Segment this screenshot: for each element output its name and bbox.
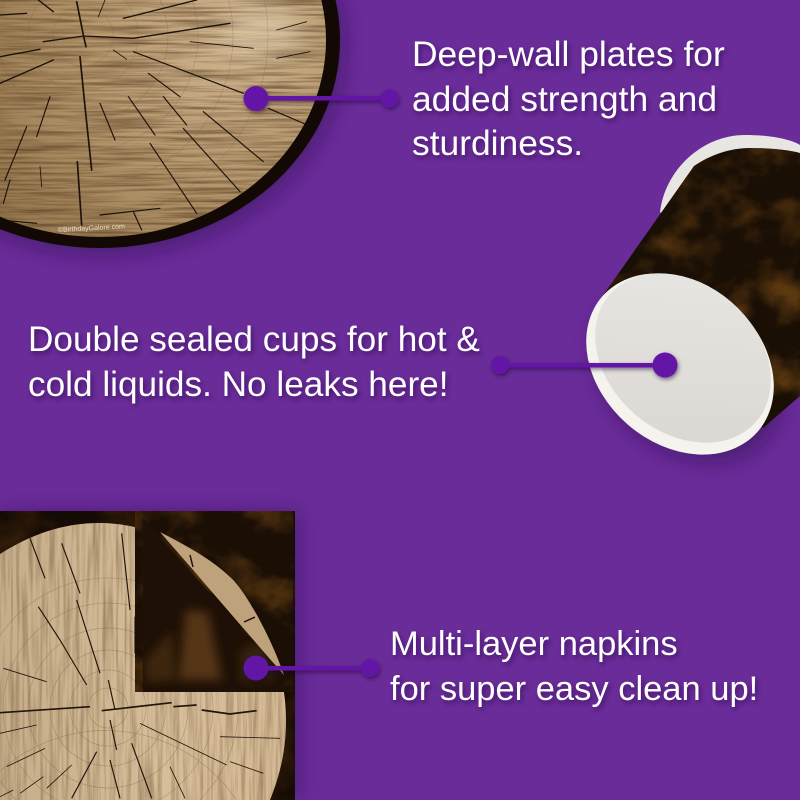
- text: plates: [412, 34, 727, 163]
- text: napkins: Multi-layer napkins: [390, 625, 678, 663]
- text: cups: Double sealed cups for hot &: [28, 320, 480, 359]
- wood sliver: [160, 532, 284, 675]
- text: plates: Deep-wall plates for: [412, 34, 725, 74]
- napkin shadow: [0, 511, 300, 800]
- cup base: [550, 236, 800, 492]
- cup shadow: [558, 244, 800, 500]
- text: napkins: for super easy clean up!: [390, 670, 758, 708]
- plate wood surface: [0, 0, 340, 250]
- text: cups: cold liquids. No leaks here!: [28, 364, 449, 404]
- plate shadow: [0, 0, 346, 256]
- cup: [586, 135, 800, 470]
- dark fold panel: [143, 518, 250, 692]
- napkin backing: [0, 511, 295, 800]
- napkin wood: [0, 515, 295, 800]
- napkin cracks: [0, 533, 280, 798]
- cup body: [604, 148, 800, 428]
- plate: [0, 0, 346, 256]
- plate rim: [0, 0, 340, 248]
- cup rim: [660, 135, 800, 240]
- connector: cup: [491, 352, 678, 378]
- folded corner: [135, 511, 293, 692]
- text: napkins: [390, 625, 759, 712]
- text: cups: [28, 320, 482, 408]
- text: plates: added strength and: [412, 78, 717, 118]
- plate cracks: [0, 0, 310, 230]
- napkin: [0, 511, 300, 800]
- text: plates: sturdiness.: [412, 123, 583, 163]
- copyright mark: ©BirthdayGalore.com: [58, 222, 125, 234]
- connector: napkin: [244, 656, 379, 680]
- connector: plate: [244, 86, 398, 111]
